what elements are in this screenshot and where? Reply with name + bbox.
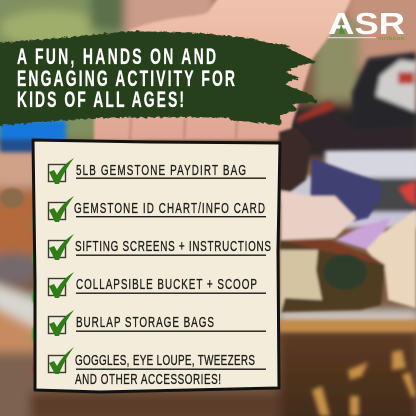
checklist item: bucket and scoop — [48, 272, 266, 298]
logo: ASR Outdoor: OUTDOOR — [378, 36, 405, 41]
heading: KIDS OF ALL AGES! — [17, 87, 184, 112]
checklist item: bucket and scoop: COLLAPSIBLE BUCKET + SCOOP — [76, 276, 257, 293]
finger gaps — [130, 118, 237, 140]
banner: green brush stroke — [0, 31, 318, 126]
checklist item: paydirt bag: 5LB GEMSTONE PAYDIRT BAG — [76, 162, 246, 179]
checklist item: burlap bags — [48, 310, 266, 336]
checklist item: burlap bags: BURLAP STORAGE BAGS — [76, 314, 214, 331]
panel: checklist card — [33, 140, 280, 392]
checklist item: accessories: AND OTHER ACCESSORIES! — [75, 371, 221, 388]
gemstones — [0, 127, 416, 315]
heading: A FUN, HANDS ON AND — [17, 44, 216, 69]
checklist item: ID chart — [48, 196, 266, 222]
heading: ENGAGING ACTIVITY FOR — [17, 66, 235, 91]
wood highlights — [312, 350, 416, 416]
green marks along card edge — [32, 218, 35, 373]
checklist item: paydirt bag — [48, 158, 266, 184]
shoe detail — [296, 52, 416, 206]
hand — [94, 0, 352, 140]
logo: ASR Outdoor: ASR — [328, 6, 405, 41]
checklist item: sifting screens: SIFTING SCREENS + INSTRUCTIONS — [75, 238, 271, 255]
checklist item: accessories — [48, 347, 266, 388]
heading — [17, 44, 235, 112]
checklist item: ID chart: GEMSTONE ID CHART/INFO CARD — [74, 200, 265, 217]
checklist item: accessories: GOGGLES, EYE LOUPE, TWEEZERS — [75, 352, 255, 369]
checklist item: sifting screens — [48, 234, 271, 260]
